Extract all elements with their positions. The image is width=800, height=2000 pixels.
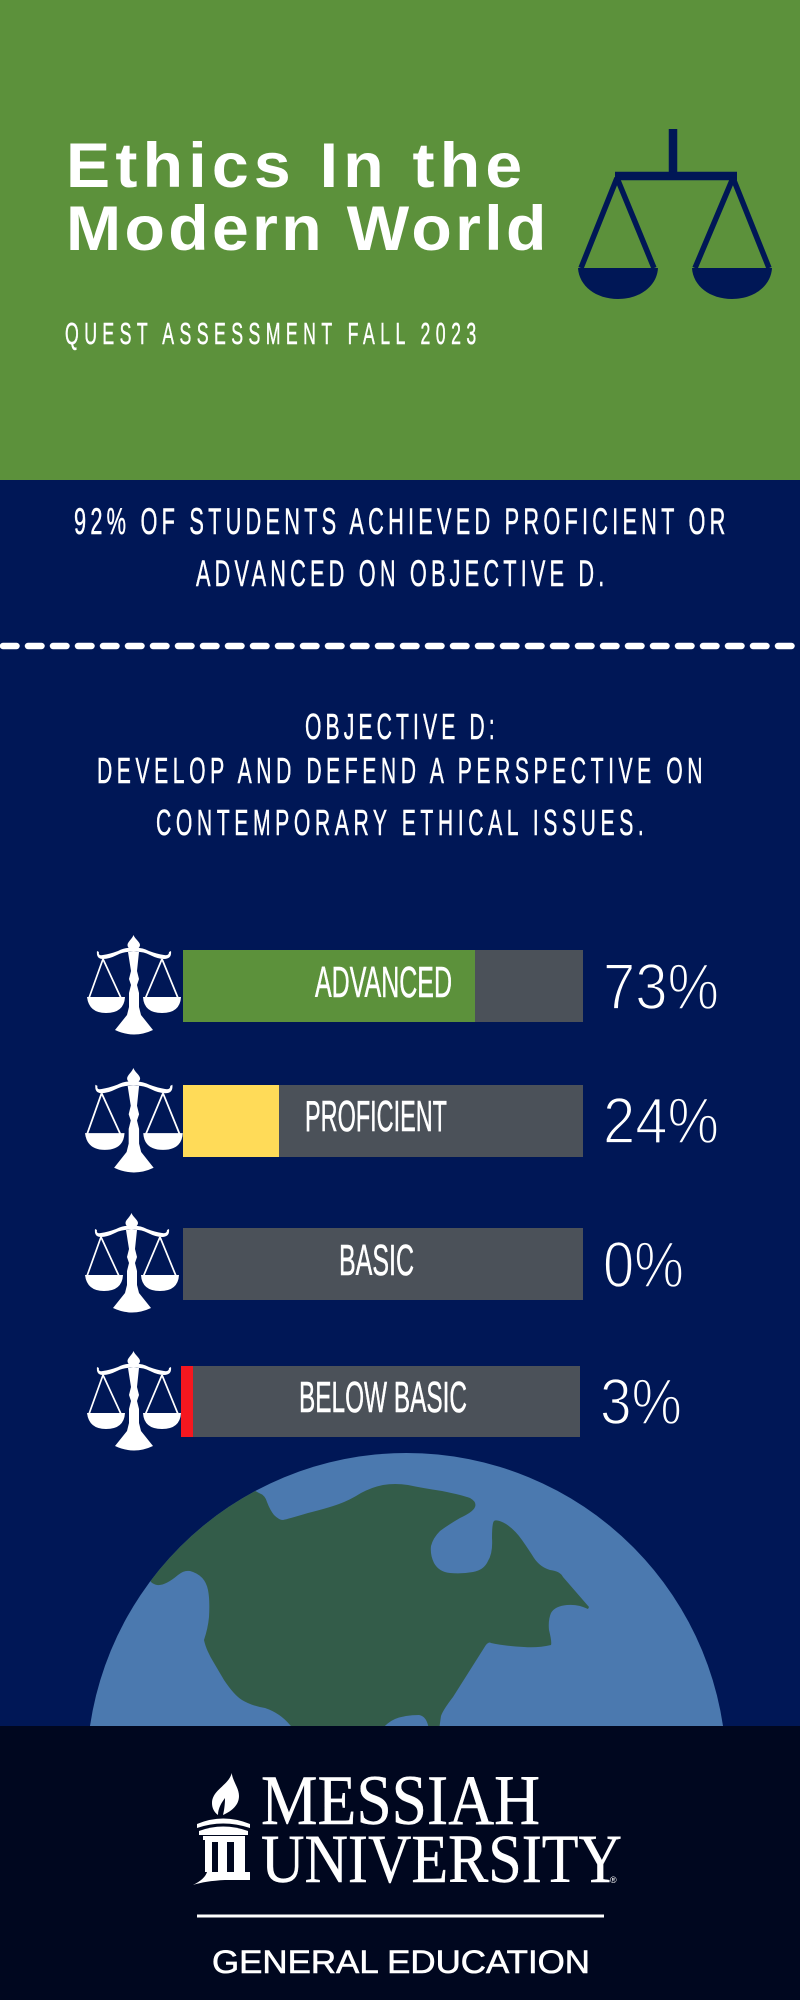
value: 73%: 73%: [603, 950, 719, 1023]
value: 24%: 24%: [603, 1084, 719, 1157]
value: 3%: 3%: [600, 1365, 682, 1438]
icon: scale: [87, 1351, 181, 1450]
bar: basic track: [183, 1228, 583, 1300]
objective text: [97, 707, 703, 844]
icon: scale: [87, 935, 181, 1034]
icon: torch: [193, 1773, 250, 1885]
objective text: OBJECTIVE D:: [305, 707, 495, 748]
row: below basic: [87, 1351, 682, 1450]
title: [66, 130, 546, 264]
bar: advanced fill: [183, 950, 475, 1022]
bar: below basic fill: [181, 1366, 193, 1437]
land: north america: [140, 1470, 589, 1730]
label: proficient: PROFICIENT: [305, 1092, 447, 1141]
dashed divider: [3, 643, 800, 649]
row: proficient: [85, 1068, 719, 1172]
objective text: DEVELOP AND DEFEND A PERSPECTIVE ON: [97, 751, 703, 792]
label: basic: BASIC: [339, 1236, 414, 1285]
bar: proficient track: [183, 1085, 583, 1157]
bar: below basic track: [181, 1366, 580, 1437]
text: messiah: MESSIAH: [261, 1762, 540, 1840]
icon: balance scale header: [578, 129, 772, 299]
bar: proficient fill: [183, 1085, 279, 1157]
icon: scale: [85, 1068, 183, 1172]
divider rule: [197, 1914, 604, 1918]
label: below basic: BELOW BASIC: [299, 1373, 467, 1422]
headline: 92% statement: ADVANCED ON OBJECTIVE D.: [196, 553, 604, 595]
text: university: UNIVERSITY: [261, 1821, 622, 1897]
headline: 92% statement: 92% OF STUDENTS ACHIEVED PROFICIENT OR: [74, 501, 725, 543]
text: general education: GENERAL EDUCATION: [212, 1944, 590, 1980]
panel: navy body: [0, 480, 800, 1726]
row: advanced: [87, 935, 719, 1034]
text: registered mark: ®: [610, 1875, 617, 1885]
panel: green header: [0, 0, 800, 480]
objective text: CONTEMPORARY ETHICAL ISSUES.: [156, 803, 644, 844]
value: 0%: 0%: [603, 1228, 684, 1301]
icon: scale: [85, 1213, 179, 1312]
title: Ethics In the: [66, 130, 522, 201]
logo: messiah university: [193, 1762, 622, 1980]
globe: [90, 1453, 723, 1726]
panel: footer: [0, 1726, 800, 2000]
bar: advanced track: [183, 950, 583, 1022]
label: advanced: ADVANCED: [315, 958, 452, 1007]
row: basic: [85, 1213, 684, 1312]
title: Modern World: [66, 193, 546, 264]
headline: 92% statement: [74, 501, 725, 595]
subtitle: QUEST ASSESSMENT FALL 2023: [65, 317, 476, 351]
